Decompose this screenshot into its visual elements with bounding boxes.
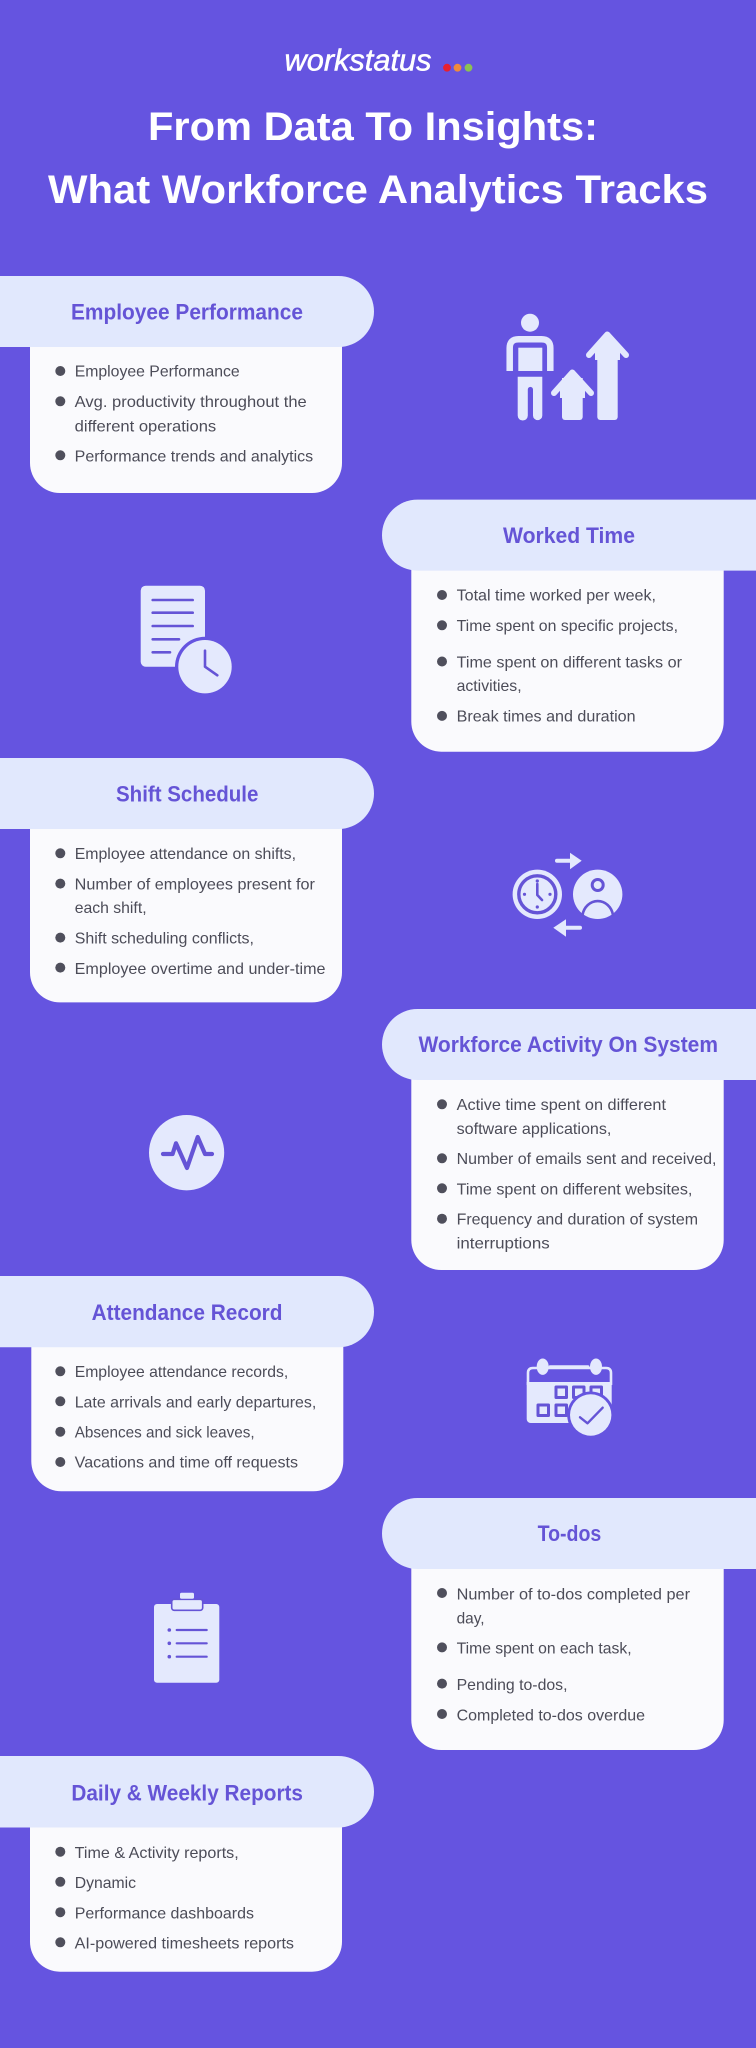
card body: [30, 340, 342, 493]
bullet list: Number of employees present for: [75, 876, 316, 893]
bullet list: Time spent on each task,: [457, 1641, 632, 1658]
panel: attendance record: [0, 1276, 374, 1491]
heading pill: To-dos: [538, 1521, 601, 1546]
card body: [411, 1070, 724, 1270]
panel: to-dos: [382, 1498, 756, 1750]
bullet list: Avg. productivity throughout the: [75, 394, 307, 411]
heading pill: [0, 758, 374, 829]
title: What Workforce Analytics Tracks: [48, 168, 708, 212]
card body: [411, 560, 724, 752]
title: [48, 105, 708, 212]
bullet list: Late arrivals and early departures,: [75, 1394, 316, 1411]
card body: [411, 1560, 724, 1750]
icon: person with rising arrows: [510, 314, 626, 421]
bullet list: software applications,: [457, 1121, 611, 1138]
bullet list: [437, 588, 683, 726]
bullet list: Time & Activity reports,: [75, 1845, 239, 1862]
bullet list: Employee attendance on shifts,: [75, 846, 296, 863]
logo: workstatus: workstatus: [284, 42, 432, 78]
bullet list: Vacations and time off requests: [75, 1455, 298, 1472]
bullet list: day,: [457, 1610, 485, 1628]
bullet list: Employee Performance: [75, 364, 240, 381]
icon: calendar with check: [527, 1358, 614, 1438]
card body: [30, 1820, 342, 1972]
bullet list: Time spent on different tasks or: [457, 654, 683, 671]
panel: daily and weekly reports: [0, 1756, 374, 1972]
heading pill: [382, 500, 756, 571]
bullet list: [55, 1364, 316, 1472]
bullet list: [437, 1097, 716, 1252]
icon: document with clock: [141, 586, 235, 697]
icon: clipboard checklist: [154, 1593, 219, 1683]
bullet list: Number of to-dos completed per: [457, 1587, 691, 1604]
bullet list: Employee attendance records,: [75, 1364, 288, 1381]
bullet list: Pending to-dos,: [457, 1677, 568, 1694]
bullet list: Performance trends and analytics: [75, 448, 313, 465]
heading pill: [0, 1276, 374, 1347]
title: From Data To Insights:: [148, 105, 598, 149]
bullet list: Number of emails sent and received,: [457, 1151, 716, 1168]
heading pill: [382, 1498, 756, 1569]
heading pill: [0, 276, 374, 347]
card body: [31, 1340, 343, 1491]
heading pill: [0, 1756, 374, 1828]
icon: activity pulse: [149, 1115, 224, 1190]
bullet list: Frequency and duration of system: [457, 1212, 698, 1229]
bullet list: Total time worked per week,: [457, 588, 656, 604]
heading pill: [382, 1009, 756, 1080]
heading pill: Daily & Weekly Reports: [71, 1780, 303, 1805]
bullet list: [55, 846, 326, 978]
bullet list: Performance dashboards: [75, 1905, 254, 1922]
bullet list: each shift,: [75, 900, 147, 917]
bullet list: different operations: [75, 418, 216, 435]
heading pill: Shift Schedule: [116, 781, 258, 806]
bullet list: Active time spent on different: [457, 1097, 667, 1114]
bullet list: Time spent on different websites,: [457, 1181, 692, 1198]
bullet list: activities,: [457, 678, 522, 695]
heading pill: Employee Performance: [71, 299, 303, 324]
bullet list: Time spent on specific projects,: [457, 618, 678, 635]
bullet list: AI-powered timesheets reports: [75, 1936, 294, 1952]
bullet list: interruptions: [457, 1235, 550, 1252]
bullet list: [437, 1587, 691, 1725]
panel: workforce activity on system: [382, 1009, 756, 1270]
heading pill: Worked Time: [503, 523, 635, 548]
panel: shift schedule: [0, 758, 374, 1002]
bullet list: [55, 364, 313, 465]
bullet list: Absences and sick leaves,: [75, 1424, 255, 1441]
bullet list: Dynamic: [75, 1875, 136, 1892]
bullet list: Employee overtime and under-time: [75, 961, 326, 978]
card body: [30, 820, 342, 1002]
panel: worked time: [382, 500, 756, 752]
bullet list: Completed to-dos overdue: [457, 1708, 645, 1725]
heading pill: Workforce Activity On System: [418, 1032, 718, 1057]
icon: clock and person exchange: [513, 853, 622, 937]
bullet list: Break times and duration: [457, 709, 636, 726]
panel: employee performance: [0, 276, 374, 493]
bullet list: [55, 1845, 294, 1952]
bullet list: Shift scheduling conflicts,: [75, 930, 254, 948]
heading pill: Attendance Record: [92, 1300, 282, 1325]
